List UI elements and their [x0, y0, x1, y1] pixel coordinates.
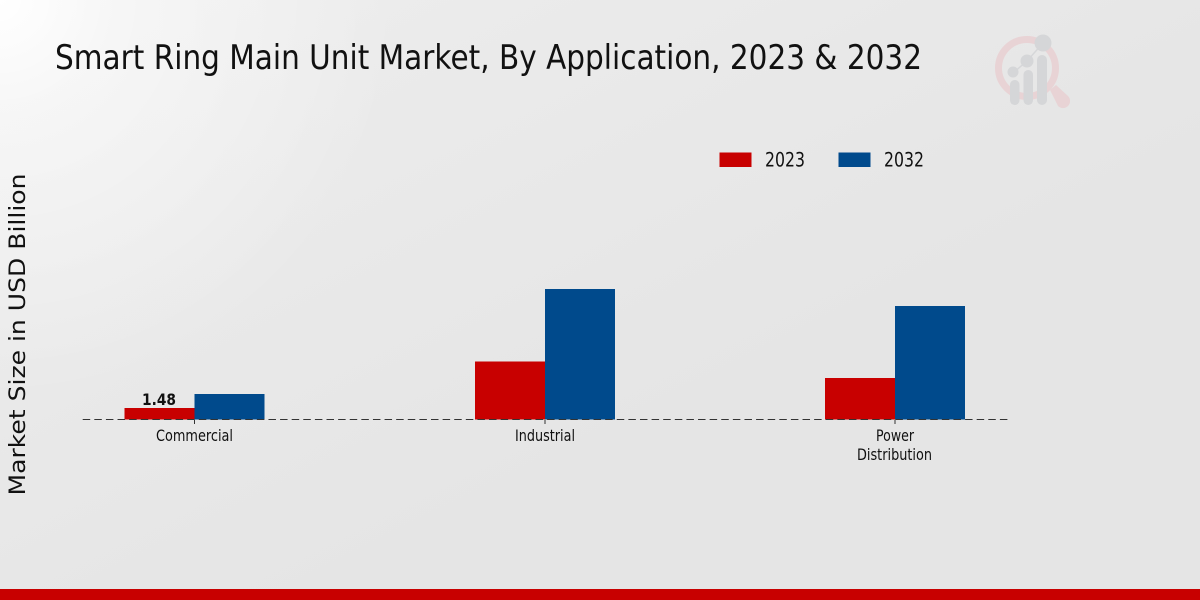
- category: Power Distribution: Distribution: [857, 445, 932, 464]
- bars: Industrial: [475, 289, 615, 420]
- bars: Commercial: [124, 394, 264, 420]
- y axis label: Market Size in USD Billion: [5, 174, 31, 496]
- category: Industrial: [515, 420, 575, 445]
- icon: magnifier logo: [998, 34, 1070, 108]
- bar chart: [83, 289, 1007, 464]
- category: Power Distribution: Power: [876, 426, 914, 445]
- legend: 2023: [720, 148, 805, 172]
- legend: 2032: [838, 148, 924, 172]
- category: Industrial: Industrial: [515, 426, 575, 445]
- bars: Power Distribution: [825, 306, 965, 420]
- baseline: [83, 418, 1007, 420]
- legend: 2032: 2032: [884, 148, 924, 172]
- footer bar: [0, 589, 1200, 600]
- category: Power Distribution: [857, 420, 932, 464]
- legend: [720, 148, 924, 172]
- title: Smart Ring Main Unit Market, By Application, 2023 & 2032: [55, 38, 922, 78]
- category: Commercial: [156, 420, 233, 445]
- legend: 2023: 2023: [765, 148, 805, 172]
- category: Commercial: Commercial: [156, 426, 233, 445]
- value label: 1.48: [142, 390, 176, 409]
